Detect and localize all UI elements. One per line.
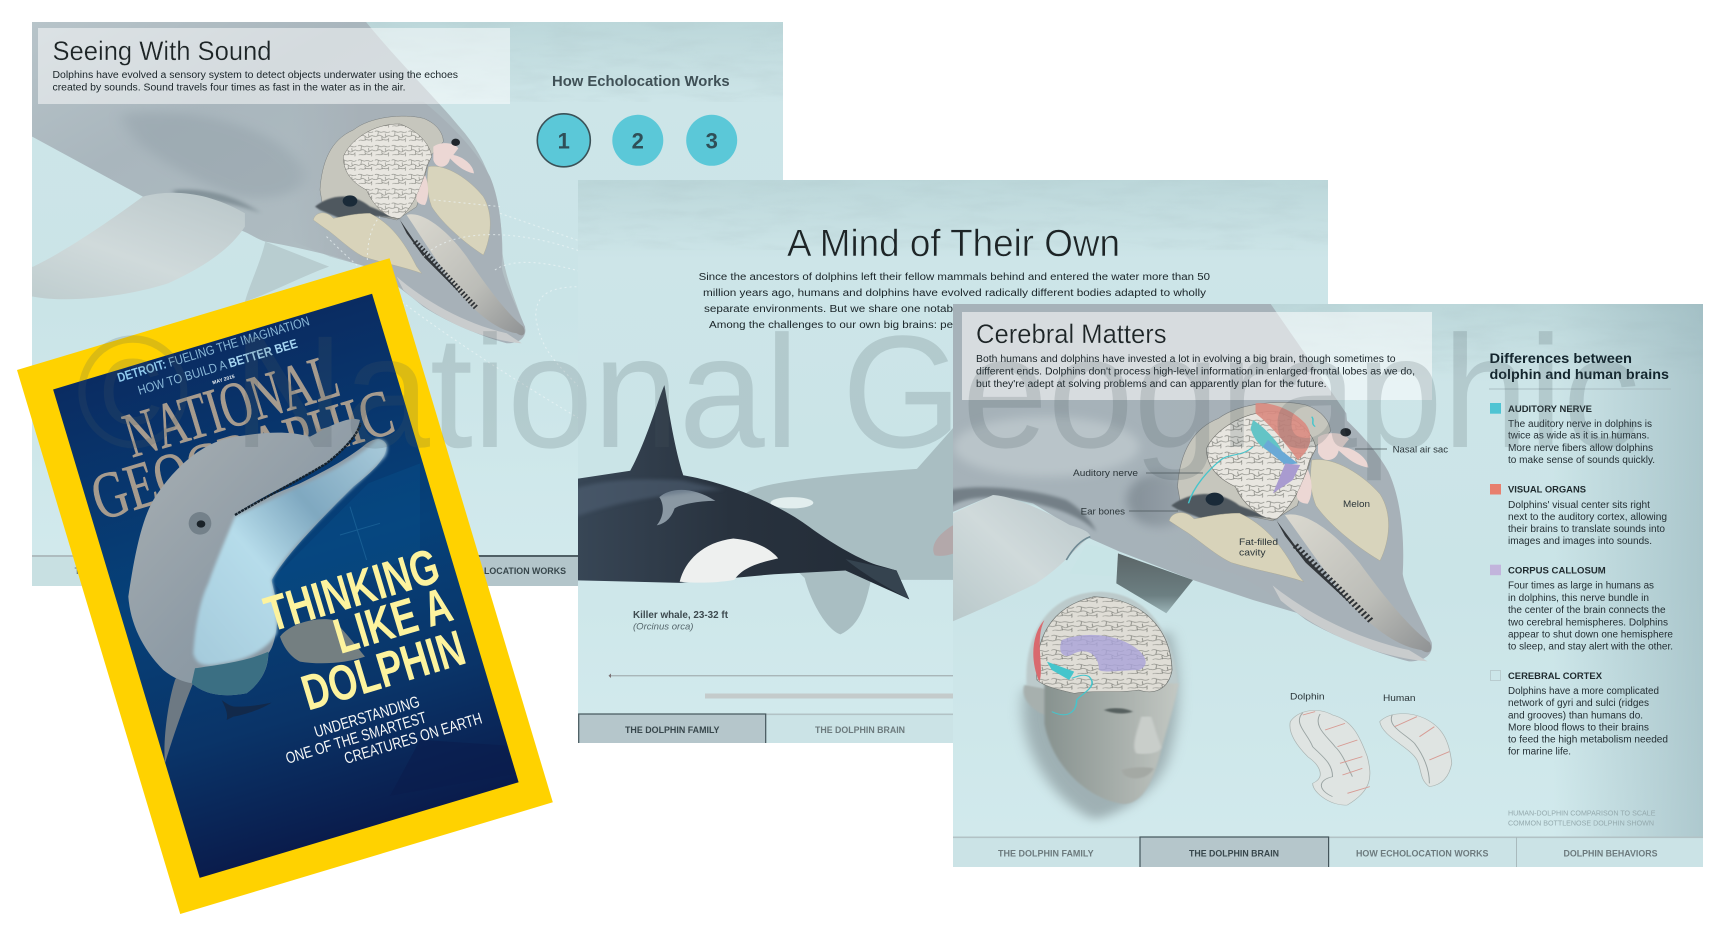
panel: seeing with sound (0, 0, 783, 586)
intro text (699, 272, 1210, 331)
legend: auditory nerve (1490, 403, 1655, 466)
title box (962, 312, 1432, 400)
legend: cerebral cortex: to feed the high metabolism needed (1508, 735, 1668, 746)
intro text: Among the challenges to our own big brains: pe (709, 320, 954, 331)
cover headlines: ONE OF THE SMARTEST (284, 709, 429, 768)
intro text: separate environments. But we share one notab (704, 304, 953, 315)
timeline slider (608, 674, 956, 698)
anatomy labels with leader lines: Auditory nerve (1073, 468, 1138, 479)
cortex comparison diagrams: Human (1383, 693, 1416, 704)
tab bar: DOLPHIN BEHAVIORS (1564, 848, 1658, 858)
legend: cerebral cortex: network of gyri and sulci (ridges (1508, 698, 1649, 709)
legend: corpus callosum: Four times as large in humans as (1508, 581, 1654, 592)
anatomy labels with leader lines: Fat-filled (1239, 537, 1278, 548)
tab bar: THE DOLPHIN FAMILY (998, 848, 1094, 858)
anatomy labels with leader lines: Ear bones (1081, 507, 1125, 518)
tab bar (578, 713, 953, 743)
tab bar: T (75, 566, 81, 576)
anatomy labels with leader lines: Melon (1343, 499, 1370, 510)
cover headlines: THINKING (258, 538, 446, 643)
legend: cerebral cortex: CEREBRAL CORTEX (1508, 671, 1603, 682)
tab bar: THE DOLPHIN BRAIN (815, 725, 905, 735)
legend: corpus callosum: to sleep, and stay alert with the other. (1508, 642, 1673, 653)
title box: Dolphins have evolved a sensory system to detect objects underwater using the echoes (52, 70, 458, 81)
legend: corpus callosum: CORPUS CALLOSUM (1508, 566, 1606, 577)
species label (633, 610, 729, 632)
cover masthead: MAY 2015 (212, 374, 236, 386)
legend: cerebral cortex: Dolphins have a more complicated (1508, 686, 1659, 697)
legend: visual organs: images and images into sounds. (1508, 536, 1652, 547)
legend: cerebral cortex: and grooves) than humans do. (1508, 710, 1643, 721)
dolphin anatomy with coloured brain regions (950, 300, 1432, 661)
step buttons 1 2 3: 3 (706, 128, 718, 154)
ghost orca and other whales (746, 428, 953, 634)
panel: a mind of their own (555, 180, 1328, 744)
title box: but they're adept at solving problems and can apparently plan for the future. (976, 379, 1327, 390)
tab bar (32, 555, 578, 586)
legend: cerebral cortex: More blood flows to their brains (1508, 722, 1649, 733)
killer whale illustration (555, 385, 909, 599)
cover headlines: CREATURES ON EARTH (342, 711, 484, 768)
legend: corpus callosum: appear to shut down one hemisphere (1508, 629, 1673, 640)
anatomy labels with leader lines (1073, 445, 1448, 559)
legend: visual organs: VISUAL ORGANS (1508, 485, 1586, 496)
cortex comparison diagrams: Dolphin (1290, 692, 1325, 703)
panel: cerebral matters (950, 300, 1703, 868)
legend: visual organs: Dolphins' visual center sits right (1508, 500, 1650, 511)
cover headlines: LIKE A (327, 577, 458, 665)
legend: cerebral cortex: for marine life. (1508, 746, 1571, 757)
watermark: © National Geographic (76, 302, 1640, 481)
legend: corpus callosum (1490, 565, 1673, 653)
cover headlines: DOLPHIN (295, 620, 471, 721)
step buttons 1 2 3: 1 (558, 128, 570, 154)
sidebar heading: dolphin and human brains (1490, 366, 1669, 382)
anatomy labels with leader lines: cavity (1239, 548, 1266, 559)
title box: different ends. Dolphins don't process high-level information in enlarged frontal lobes as we do, (976, 367, 1415, 378)
cover frame and background (17, 258, 553, 914)
tab bar: THE DOLPHIN FAMILY (625, 725, 720, 735)
cover headlines (237, 533, 516, 836)
sidebar heading (1489, 350, 1671, 390)
legend: auditory nerve: twice as wide as it is in humans. (1508, 431, 1649, 442)
anatomy labels with leader lines: Nasal air sac (1393, 445, 1448, 456)
legend: corpus callosum: the center of the brain connects the (1508, 605, 1666, 616)
tab bar (953, 836, 1703, 868)
tab bar: THE DOLPHIN BRAIN (1189, 848, 1279, 858)
species label: (Orcinus orca) (633, 622, 694, 632)
legend: auditory nerve: to make sense of sounds quickly. (1508, 455, 1655, 466)
intro text: million years ago, humans and dolphins have evolved radically different bodies adapted to wholly (703, 288, 1206, 299)
title box: created by sounds. Sound travels four times as fast in the water as in the air. (52, 83, 406, 94)
legend: cerebral cortex (1490, 670, 1668, 757)
cover masthead: GEOGRAPHIC (83, 376, 402, 535)
cover headlines: UNDERSTANDING (312, 694, 422, 741)
human head with brain (1023, 592, 1179, 820)
sidebar heading: Differences between (1490, 350, 1632, 366)
footnote: COMMON BOTTLENOSE DOLPHIN SHOWN (1508, 820, 1654, 827)
title box: Cerebral Matters (976, 319, 1167, 349)
title: A Mind of Their Own (787, 223, 1120, 265)
legend: corpus callosum: in dolphins, this nerve bundle in (1508, 593, 1649, 604)
footnote: HUMAN-DOLPHIN COMPARISON TO SCALE (1508, 811, 1656, 818)
step buttons 1 2 3 (537, 114, 737, 167)
cover dolphin (128, 419, 420, 763)
title box: Seeing With Sound (52, 36, 272, 66)
tab bar: LOCATION WORKS (484, 566, 566, 576)
legend: auditory nerve: More nerve fibers allow dolphins (1508, 443, 1653, 454)
species label: Killer whale, 23-32 ft (633, 610, 729, 621)
legend: auditory nerve: The auditory nerve in dolphins is (1508, 419, 1652, 430)
legend: visual organs: their brains to translate sounds into (1508, 524, 1665, 535)
echo sound waves (327, 200, 582, 420)
title box (38, 28, 510, 104)
title box: Both humans and dolphins have invested a lot in evolving a big brain, though sometimes to (976, 354, 1396, 365)
legend: visual organs: next to the auditory cortex, allowing (1508, 512, 1667, 523)
step buttons 1 2 3: 2 (632, 128, 644, 154)
tab bar: HOW ECHOLOCATION WORKS (1356, 848, 1488, 858)
cover masthead (60, 298, 402, 535)
dolphin anatomy illustration (32, 22, 526, 344)
cortex comparison diagrams (1290, 692, 1452, 805)
intro text: Since the ancestors of dolphins left their fellow mammals behind and entered the water more than 50 (699, 272, 1210, 283)
cover masthead: HOW TO BUILD A BETTER BEE (136, 336, 299, 398)
heading: how echolocation works: How Echolocation Works (552, 74, 730, 90)
legend: corpus callosum: two cerebral hemispheres. Dolphins (1508, 617, 1668, 628)
cover masthead: DETROIT: FUELING THE IMAGINATION (115, 313, 311, 385)
legend: auditory nerve: AUDITORY NERVE (1508, 404, 1592, 415)
cover masthead: NATIONAL (116, 340, 347, 471)
magazine cover (17, 258, 553, 914)
legend: visual organs (1490, 484, 1667, 547)
footnote (1508, 811, 1656, 827)
